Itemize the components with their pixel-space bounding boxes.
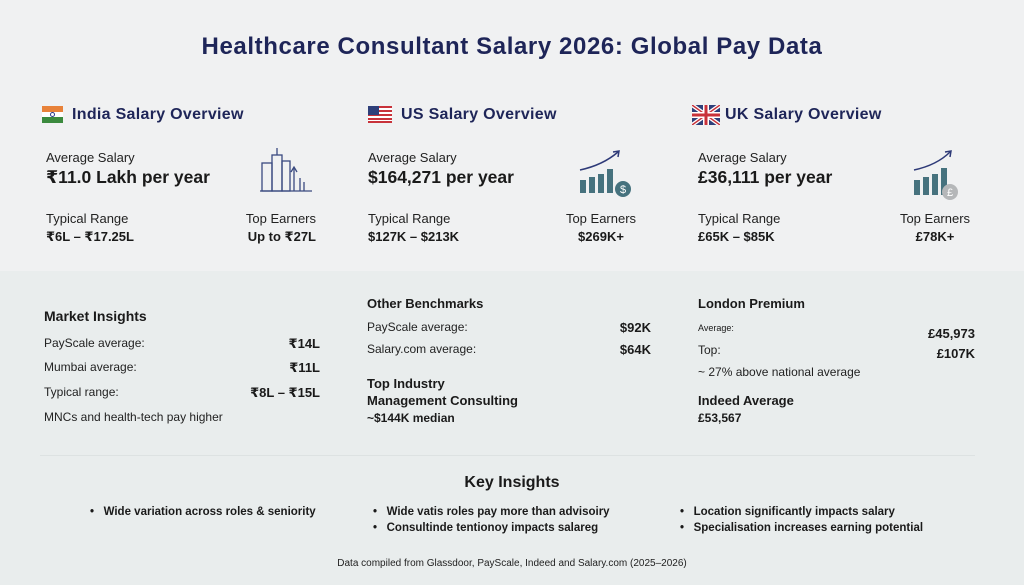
panel: London Premium: ~ 27% above national average [698,365,860,379]
icon: chart dollar: $ [620,184,626,196]
panel: London Premium: Top: [698,343,721,357]
panel: Other Benchmarks: Top Industry [367,376,445,391]
average salary: Average Salary [698,150,787,165]
typical range [698,211,780,244]
typical range [368,211,459,244]
panel: London Premium: Average: [698,323,734,333]
key insights list: • Wide vatis roles pay more than advisoiry [373,506,610,518]
icon: UK flag [692,105,720,125]
panel: Market Insights: PayScale average: [44,336,145,350]
panel: Market Insights: ₹8L – ₹15L [250,385,320,400]
average salary: Average Salary [46,150,135,165]
panel: Market Insights: ₹11L [289,360,320,375]
top earners: £78K+ [916,229,954,244]
panel: Other Benchmarks: $92K [620,320,651,335]
top earners: Top Earners [900,211,970,226]
panel: London Premium: £53,567 [698,411,741,425]
typical range: Typical Range [698,211,780,226]
panel: Market Insights: Market Insights [44,308,147,324]
panel: Market Insights [44,308,320,424]
panel: London Premium: £45,973 [928,326,975,341]
panel: London Premium [698,296,975,425]
key insights list: • Location significantly impacts salary [680,506,895,518]
typical range: Typical Range [46,211,128,226]
heading: India: India Salary Overview [72,106,244,123]
top earners [900,211,970,244]
typical range: ₹6L – ₹17.25L [46,229,134,244]
average salary: ₹11.0 Lakh per year [46,167,210,187]
top earners: Top Earners [246,211,316,226]
top earners [246,211,316,244]
heading: US: US Salary Overview [401,106,557,123]
footer source: Data compiled from Glassdoor, PayScale, Indeed and Salary.com (2025–2026) [337,558,687,569]
typical range: £65K – $85K [698,229,775,244]
panel: India [42,106,316,244]
typical range [46,211,134,244]
panel: Market Insights: Typical range: [44,385,119,399]
icon: buildings [260,148,312,192]
icon: chart pound: £ [947,187,953,199]
title: Healthcare Consultant Salary 2026: Global Pay Data [202,33,822,60]
panel: Market Insights: MNCs and health-tech pay higher [44,410,223,424]
top earners: $269K+ [578,229,624,244]
top earners [566,211,636,244]
key insights list: • Wide variation across roles & seniority [90,506,316,518]
average salary [698,150,832,187]
average salary: Average Salary [368,150,457,165]
panel: London Premium: London Premium [698,296,805,311]
panel: US [368,106,636,244]
panel: Other Benchmarks: Management Consulting [367,393,518,408]
panel: London Premium: £107K [937,346,975,361]
icon: US flag [368,106,392,123]
heading: Key Insights: Key Insights [464,474,560,491]
icon: chart dollar [580,150,631,197]
panel: Other Benchmarks: Other Benchmarks [367,296,483,311]
average salary [46,150,210,187]
key insights list [90,506,923,534]
panel: Market Insights: Mumbai average: [44,360,137,374]
panel: Other Benchmarks: Salary.com average: [367,342,476,356]
panel: London Premium: Indeed Average [698,393,794,408]
key insights list: • Specialisation increases earning potential [680,522,923,534]
top earners: Top Earners [566,211,636,226]
top earners: Up to ₹27L [248,229,316,244]
average salary: £36,111 per year [698,167,832,187]
average salary: $164,271 per year [368,167,514,187]
panel: Other Benchmarks [367,296,651,425]
heading: UK: UK Salary Overview [725,106,882,123]
panel: Other Benchmarks: $64K [620,342,651,357]
panel: Other Benchmarks: PayScale average: [367,320,468,334]
panel: UK [692,105,970,244]
key insights list: • Consultinde tentionoy impacts salareg [373,522,598,534]
typical range: $127K – $213K [368,229,459,244]
typical range: Typical Range [368,211,450,226]
panel: Other Benchmarks: ~$144K median [367,411,455,425]
icon: chart pound [914,150,958,200]
panel: Market Insights: ₹14L [289,336,320,351]
average salary [368,150,514,187]
icon: India flag [42,106,63,123]
